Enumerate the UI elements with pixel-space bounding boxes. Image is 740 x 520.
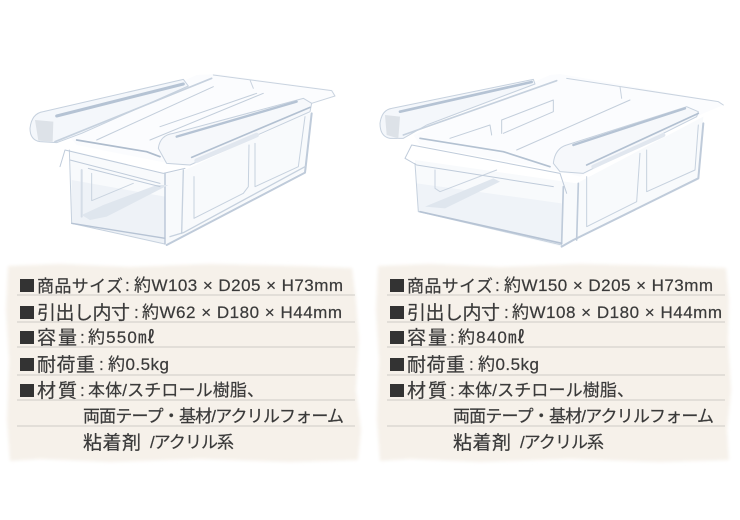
spec: inner size: 約W62 × D180 × H44mm bbox=[142, 303, 342, 322]
spec: load capacity bbox=[390, 354, 539, 376]
spec: inner size: 約W108 × D180 × H44mm bbox=[512, 303, 722, 322]
spec: product size: : bbox=[495, 276, 500, 295]
spec: material: 粘着剤 bbox=[83, 432, 141, 454]
panel: small drawer specifications bbox=[6, 264, 361, 462]
spec: inner size bbox=[20, 302, 342, 324]
panel: large drawer specifications bbox=[376, 264, 731, 462]
spec: material: 本体/スチロール樹脂、 bbox=[88, 381, 264, 400]
spec: inner size: 引出し内寸 bbox=[407, 302, 500, 324]
spec: product size: 商品サイズ bbox=[37, 277, 123, 296]
spec: material: : bbox=[80, 381, 85, 400]
spec: capacity: 約840㎖ bbox=[458, 328, 525, 347]
spec: product size: 約W103 × D205 × H73mm bbox=[134, 276, 343, 295]
spec: capacity: : bbox=[450, 328, 455, 347]
spec: inner size: : bbox=[504, 303, 509, 322]
spec: load capacity: : bbox=[99, 355, 104, 374]
spec: material: 粘着剤 bbox=[453, 432, 511, 454]
spec: capacity: : bbox=[80, 328, 85, 347]
spec: load capacity: 耐荷重 bbox=[407, 354, 465, 376]
spec: product size: 商品サイズ bbox=[407, 277, 493, 296]
drawer body bbox=[60, 113, 312, 245]
spec: material: 本体/スチロール樹脂、 bbox=[458, 381, 634, 400]
spec: material: 両面テープ・基材/アクリルフォーム bbox=[453, 407, 714, 426]
spec: material: 材質 bbox=[37, 380, 77, 402]
spec: load capacity bbox=[20, 354, 169, 376]
spec: load capacity: 約0.5kg bbox=[108, 355, 169, 374]
spec: material: 両面テープ・基材/アクリルフォーム bbox=[83, 407, 344, 426]
spec: material: 材質 bbox=[407, 380, 447, 402]
spec: material bbox=[390, 380, 714, 454]
spec: inner size: 引出し内寸 bbox=[37, 302, 130, 324]
spec: material: /アクリル系 bbox=[520, 433, 604, 452]
spec: product size: : bbox=[125, 276, 130, 295]
spec: load capacity: 約0.5kg bbox=[478, 355, 539, 374]
spec: capacity bbox=[390, 327, 525, 349]
spec: product size bbox=[20, 276, 343, 296]
spec: capacity: 約550㎖ bbox=[88, 328, 155, 347]
spec: product size bbox=[390, 276, 713, 296]
top frame and slide rails bbox=[30, 74, 335, 167]
spec: capacity bbox=[20, 327, 155, 349]
product image: large drawer bbox=[380, 74, 723, 247]
panel background: paper bbox=[376, 264, 731, 462]
spec: material: : bbox=[450, 381, 455, 400]
spec: load capacity: : bbox=[469, 355, 474, 374]
panel background: paper bbox=[6, 264, 361, 462]
spec: material bbox=[20, 380, 344, 454]
product image: small drawer bbox=[30, 74, 335, 245]
spec: product size: 約W150 × D205 × H73mm bbox=[504, 276, 713, 295]
spec: inner size bbox=[390, 302, 722, 324]
spec: material: /アクリル系 bbox=[150, 433, 234, 452]
spec: load capacity: 耐荷重 bbox=[37, 354, 95, 376]
drawer body bbox=[405, 117, 703, 247]
spec: capacity: 容量 bbox=[37, 327, 77, 349]
spec: inner size: : bbox=[134, 303, 139, 322]
top frame and slide rails bbox=[380, 74, 723, 177]
spec: capacity: 容量 bbox=[407, 327, 447, 349]
